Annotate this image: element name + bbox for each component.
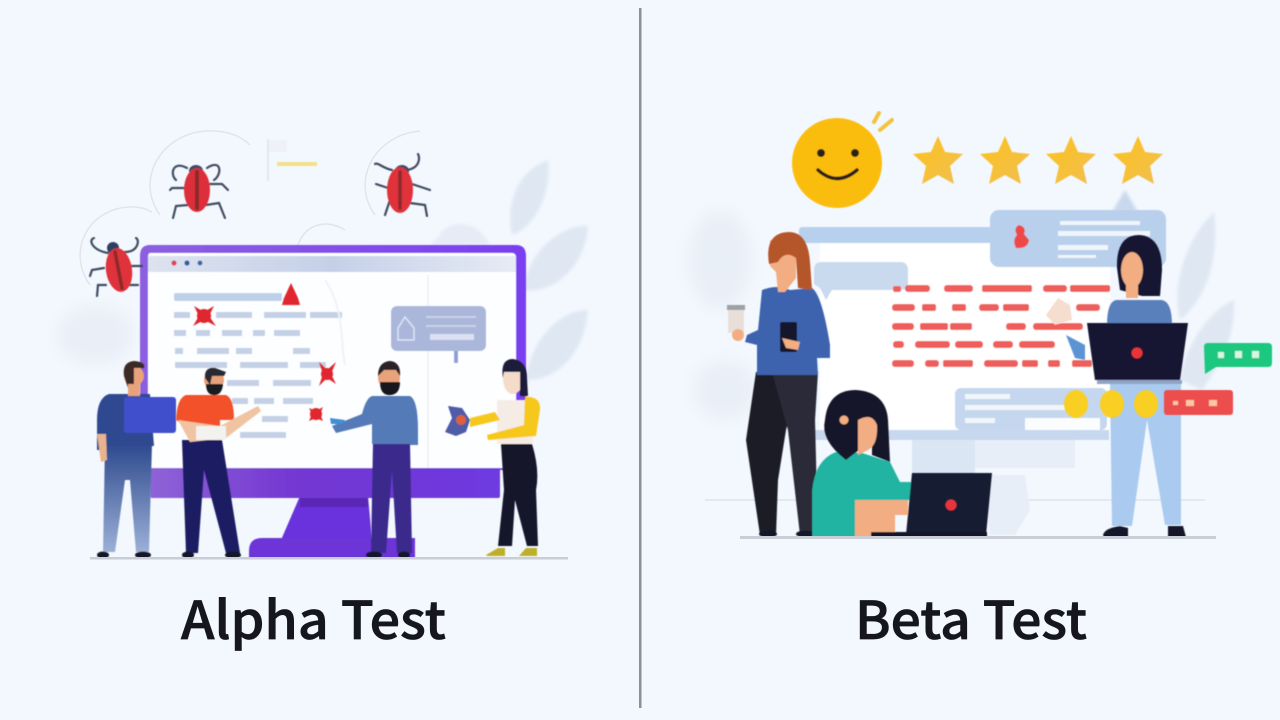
woman with phone [727,232,830,538]
bug 3 [90,238,142,296]
monitor [140,245,526,558]
text lines [174,293,342,438]
heading: alpha test: Alpha Test [181,579,446,654]
title bar [148,256,516,272]
man in blue sweater [330,361,418,558]
callout box [391,306,486,363]
left speech bubble [814,262,908,300]
ground line [90,557,568,560]
laptop [1087,323,1188,380]
monitor frame [140,245,526,470]
faint left haze [57,305,133,365]
screen [148,253,516,468]
bug 2 [375,154,430,216]
bug bubble outlines [80,131,420,285]
monitor chin [150,468,500,498]
background leaves [1112,190,1234,390]
faint dashed connector [325,275,428,468]
woman in yellow [445,359,540,556]
red reaction bubble [1164,390,1233,415]
cup in hand [727,305,745,310]
heading: beta test: Beta Test [855,579,1087,654]
faint floor line [705,499,1205,501]
monitor stand [281,496,372,540]
window dots [171,260,202,266]
woman with laptop [1046,235,1188,537]
faint left haze [688,210,757,420]
bug 1 [170,165,228,218]
background leaves [430,160,588,380]
man in red shirt [176,368,261,558]
yellow reactions [1064,390,1158,418]
seated woman [812,390,992,537]
header bar [799,227,999,243]
phone [780,322,797,352]
smiley face [792,113,892,208]
ground line [740,536,1216,539]
red text lines [892,285,1110,367]
monitor base [249,538,415,558]
laptop [124,397,176,433]
divider between panels [639,8,642,708]
man with laptop [97,361,176,558]
panel: alpha test [57,131,588,654]
lower band [806,430,1109,440]
lower comment box [955,388,1107,430]
laptop [871,473,992,537]
comment bubble [990,210,1166,267]
red avatar [1014,225,1029,248]
rating stars [913,136,1163,184]
panel: beta test [688,113,1272,654]
comment text [1058,221,1150,258]
bug splat marks [193,283,336,421]
small flag with stars [267,139,317,181]
purple splat held by woman [445,406,470,436]
website mockup [799,210,1166,535]
screen [820,238,1110,433]
lower pale shapes [912,440,975,500]
green reaction bubble [1204,343,1272,374]
